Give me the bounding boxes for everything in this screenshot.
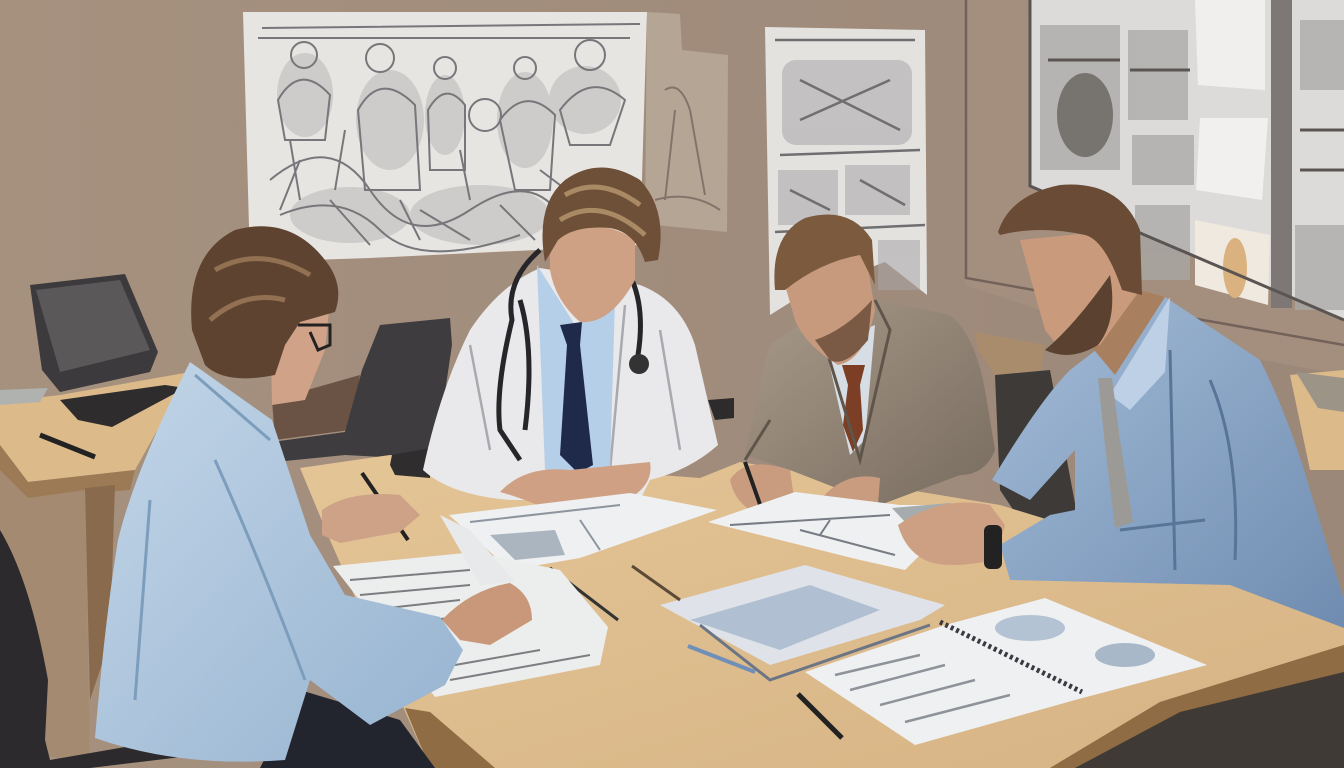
office chair behind table	[272, 318, 452, 462]
side table right	[1290, 370, 1344, 470]
doctor white coat	[423, 268, 718, 500]
poster: equipment sketch	[765, 27, 927, 315]
suit hair	[774, 214, 875, 290]
neck	[1090, 290, 1165, 375]
doctor chair arm	[390, 448, 430, 478]
computer monitor and keyboard	[0, 274, 185, 427]
doctor face	[550, 226, 635, 322]
pens on table	[362, 473, 842, 738]
face	[270, 300, 330, 405]
phone in hand	[892, 503, 962, 525]
suit jacket	[745, 300, 995, 505]
hand on papers	[442, 583, 532, 645]
striped tie	[1098, 378, 1133, 528]
shirt	[95, 362, 463, 762]
left stack of documents	[333, 515, 608, 697]
shirt	[992, 297, 1344, 628]
suit face	[785, 250, 875, 365]
doctor	[390, 168, 718, 520]
doctor shirt	[537, 265, 615, 470]
documents under grey suit colleague	[708, 492, 960, 570]
beard	[1045, 275, 1112, 355]
hair	[191, 226, 338, 378]
dark area under table right	[1060, 660, 1344, 768]
suit tie	[842, 365, 865, 452]
doctor tie	[560, 322, 593, 473]
spiral notebook	[805, 598, 1207, 745]
poster: torn back sheet	[645, 12, 728, 232]
writing hand	[322, 494, 420, 543]
poster: team sketch	[243, 12, 647, 262]
window frame wall	[965, 0, 1344, 375]
foreground chair	[0, 530, 198, 768]
face	[1020, 230, 1140, 355]
doctor hands	[500, 462, 651, 520]
trousers	[260, 690, 435, 768]
chair arm right of doctor	[708, 398, 734, 420]
suit hands	[730, 464, 880, 520]
doctor hair	[542, 168, 661, 262]
side desk left	[0, 372, 190, 768]
main table	[300, 455, 1344, 768]
bearded man on the right	[992, 185, 1344, 628]
collar	[1110, 297, 1170, 410]
window: sketches behind glass	[1030, 0, 1344, 320]
colleague in grey suit	[730, 214, 995, 520]
central report	[660, 565, 945, 680]
suit shirt	[825, 325, 875, 455]
documents under doctor	[449, 493, 717, 570]
window ledge desk	[975, 332, 1045, 375]
man in the foreground left	[0, 226, 532, 768]
back chair	[995, 370, 1080, 530]
hair	[998, 185, 1142, 295]
doctor stethoscope	[499, 250, 640, 460]
glasses	[298, 325, 330, 350]
right man hand and watch	[898, 502, 1005, 569]
